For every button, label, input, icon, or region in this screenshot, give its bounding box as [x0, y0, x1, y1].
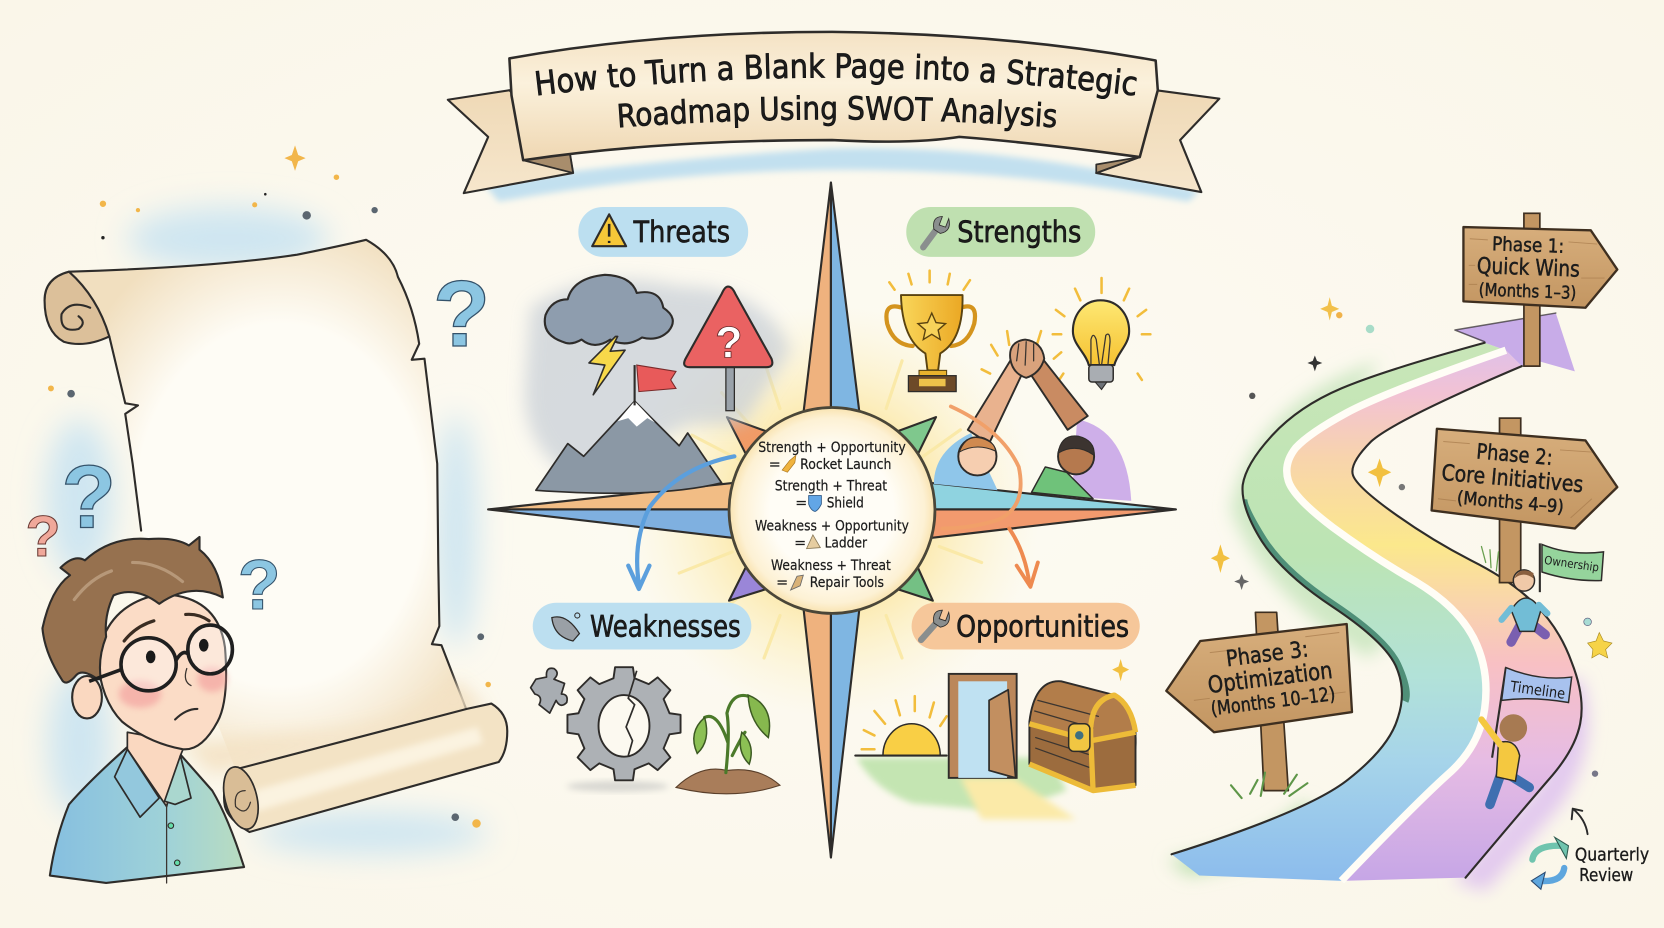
broken gear [567, 667, 681, 792]
trophy rays [889, 271, 970, 290]
left fold [523, 154, 573, 173]
grass tuft [1231, 773, 1307, 798]
right lane [1287, 350, 1582, 881]
strengths pill [906, 207, 1095, 257]
phase 2 text [1439, 437, 1586, 519]
runner figure [1511, 626, 1545, 642]
sprout [676, 695, 780, 794]
orange arrow: strength to opportunity [942, 406, 1038, 587]
threats pill [578, 207, 748, 257]
road arrowhead [1455, 313, 1575, 371]
synergy text: Strength + Threat [775, 478, 888, 494]
question mark left of scroll: ? [62, 446, 116, 546]
puzzle piece [531, 668, 567, 713]
treasure chest [1029, 681, 1136, 791]
runner figure [1490, 775, 1529, 804]
left road edge shading [1242, 499, 1404, 700]
sparkle [1112, 659, 1129, 681]
roll end [218, 763, 264, 833]
scroll outline [69, 240, 467, 711]
bulb rays [1053, 278, 1150, 380]
cheeks [119, 680, 161, 708]
north arm [803, 183, 860, 414]
icon: warning triangle [592, 214, 626, 246]
nose and mouth [185, 669, 191, 686]
quarterly review [1531, 837, 1649, 889]
open door [949, 674, 1017, 778]
synergy text: Weakness + Opportunity [755, 519, 909, 535]
synergy text: Strength + Opportunity [758, 440, 906, 456]
title text line 2: Roadmap Using SWOT Analysis [618, 95, 1056, 132]
left lane [1172, 343, 1506, 881]
face [98, 594, 226, 749]
eyes [146, 651, 155, 663]
right ribbon tail [1096, 90, 1219, 192]
synergy text: Shield [827, 495, 864, 511]
bottom roll [224, 704, 507, 832]
phase 2 text: (Months 4–9) [1456, 488, 1565, 518]
icon: cycle arrows [1531, 837, 1568, 889]
left person head [958, 437, 996, 475]
ear [72, 676, 102, 718]
center synergy circle [729, 408, 935, 613]
phase 1 text: Quick Wins [1476, 253, 1580, 283]
quarterly review label: Quarterly [1575, 845, 1649, 866]
weaknesses pill [533, 603, 751, 649]
trophy [886, 295, 975, 392]
threats illustration [525, 275, 791, 493]
question mark by head: ? [238, 546, 280, 624]
clasped hands [1010, 340, 1044, 378]
collar right [164, 756, 191, 804]
red flag [635, 365, 676, 405]
phase 1 text: (Months 1–3) [1478, 280, 1577, 304]
light path [960, 778, 1076, 819]
south arm [803, 607, 860, 857]
question marks [25, 261, 490, 624]
synergy text: Rocket Launch [800, 457, 891, 473]
phase 3 text [1204, 634, 1337, 720]
center white line [1287, 350, 1506, 881]
storm cloud [545, 275, 673, 345]
sign: phase 2 [1432, 418, 1617, 583]
phase 3 text: Optimization [1206, 656, 1334, 699]
compass rays glow [625, 304, 1039, 717]
mountain [536, 401, 722, 493]
opportunities pill [912, 603, 1140, 649]
right person head [1058, 438, 1094, 474]
compass star [488, 183, 1176, 857]
title banner [446, 30, 1220, 204]
phase 1 text: Phase 1: [1492, 232, 1565, 258]
synergy text [755, 440, 909, 591]
top curl [45, 272, 109, 344]
ownership flag: Ownership [1543, 553, 1600, 575]
rising sun [855, 696, 947, 756]
icon: rocket [782, 455, 796, 472]
warning sign: ? [715, 319, 742, 368]
synergy text: Ladder [825, 536, 867, 552]
road sparkles [1211, 297, 1612, 777]
icon: ladder [807, 535, 820, 549]
warning sign post [726, 366, 734, 411]
sign: phase 1 [1463, 213, 1617, 366]
synergy text: = [776, 575, 788, 591]
phase 3 text: Phase 3: [1225, 636, 1310, 672]
blue arrow: threat to weakness [628, 456, 734, 589]
strengths label: Strengths [957, 215, 1081, 250]
right road edge [1352, 366, 1582, 878]
weaknesses label: Weaknesses [590, 610, 741, 645]
weaknesses illustration [531, 667, 780, 794]
collar left [115, 749, 159, 817]
light bulb [1073, 300, 1129, 389]
synergy text: = [794, 536, 806, 552]
scroll sheet [69, 240, 491, 769]
quarterly review: Review [1579, 865, 1633, 886]
opportunities label: Opportunities [956, 610, 1129, 645]
rainbow road [1167, 313, 1588, 891]
icon: wrench [921, 610, 949, 640]
boy character [42, 537, 244, 883]
synergy text: = [795, 495, 807, 511]
timeline flag: Timeline [1508, 677, 1566, 703]
hair [42, 537, 223, 683]
blank scroll [45, 240, 507, 833]
left road edge [1172, 343, 1485, 854]
west arm [488, 483, 734, 538]
timeline runner [1481, 668, 1572, 804]
grass tuft [1481, 547, 1498, 571]
synergy text: Weakness + Threat [771, 558, 891, 574]
phase 2 text: Core Initiatives [1440, 460, 1584, 498]
green ground [856, 758, 1067, 812]
icon: shield [809, 496, 821, 512]
phase 3 text: (Months 10–12) [1209, 682, 1337, 720]
sign: phase 3 [1166, 612, 1352, 798]
scattered sparkles left [48, 145, 491, 828]
phase 1 text [1476, 232, 1581, 304]
road soft wash [1167, 361, 1588, 891]
glasses [89, 625, 232, 691]
icon: broken tool [552, 613, 580, 641]
pink question mark: ? [25, 505, 60, 569]
icon: tools [791, 575, 803, 590]
warning sign [684, 287, 772, 368]
opportunities illustration [855, 659, 1136, 819]
lightning bolt [589, 336, 625, 395]
icon: wrench [923, 216, 949, 247]
shirt [50, 747, 244, 883]
synergy text: Repair Tools [810, 575, 884, 591]
question mark right of scroll: ? [433, 261, 490, 366]
phase 2 text: Phase 2: [1475, 439, 1554, 471]
handshake rays [982, 331, 1061, 374]
synergy text: = [769, 457, 781, 473]
ownership runner [1502, 543, 1604, 642]
teammates [934, 340, 1131, 501]
eyebrows [124, 614, 209, 641]
threats label: Threats [633, 215, 730, 250]
watercolor washes behind scroll [46, 207, 488, 854]
east arm [930, 483, 1176, 538]
diagonal points [727, 417, 936, 601]
right fold [1096, 157, 1140, 173]
title text: How to Turn a Blank Page into a Strategic [536, 52, 1137, 99]
left ribbon tail [448, 90, 573, 193]
strengths illustration [886, 271, 1150, 501]
quarterly review arrow [1572, 809, 1588, 834]
raised arms [968, 356, 1027, 444]
banner body [509, 32, 1158, 160]
neck [127, 732, 186, 807]
